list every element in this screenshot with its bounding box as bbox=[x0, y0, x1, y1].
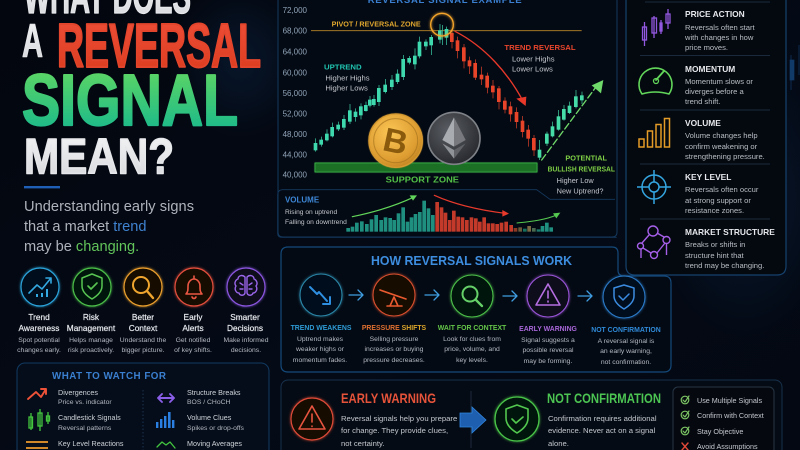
arrow bbox=[503, 291, 517, 301]
item: market structure: Breaks or shifts in bbox=[685, 240, 745, 249]
benefit: trend awareness bbox=[17, 268, 61, 354]
benefit: trend awareness: Trend bbox=[28, 312, 50, 322]
volume trend arrows bbox=[352, 195, 560, 223]
benefit: better context: Understand the bbox=[120, 337, 166, 344]
benefit: smarter decisions: Make informed bbox=[224, 337, 269, 344]
y axis labels bbox=[283, 6, 308, 180]
uptrend candles bbox=[314, 24, 448, 152]
early warning text: not certainty. bbox=[341, 439, 384, 448]
benefit: trend awareness: changes early. bbox=[17, 347, 61, 354]
item: momentum: MOMENTUM bbox=[685, 64, 735, 74]
volume panel: Falling on downtrend bbox=[285, 219, 347, 226]
subtitle: may be changing. bbox=[24, 239, 139, 255]
reversal arrow bbox=[455, 31, 526, 106]
step: early warning: possible reversal bbox=[522, 347, 574, 354]
step: not confirmation: NOT CONFIRMATION bbox=[591, 327, 661, 334]
panel: signal types bbox=[626, 0, 786, 275]
y axis labels: 56,000 bbox=[283, 89, 308, 98]
y axis labels: 44,000 bbox=[283, 151, 308, 160]
benefit: risk management: Risk bbox=[83, 312, 100, 322]
benefit: early alerts: Early bbox=[184, 312, 203, 322]
arrow bbox=[425, 290, 439, 300]
item: market structure: structure hint that bbox=[685, 251, 745, 260]
early warning text: for change. They provide clues, bbox=[341, 426, 448, 435]
not confirmation text: alone. bbox=[548, 439, 569, 448]
item: volume clues: Spikes or drop-offs bbox=[187, 425, 245, 432]
icon: bitcoin: B bbox=[380, 122, 411, 163]
not confirmation text: NOT CONFIRMATION bbox=[547, 390, 661, 406]
step: trend weakens: TREND WEAKENS bbox=[291, 325, 352, 332]
early warning text: EARLY WARNING bbox=[341, 390, 436, 406]
step: wait for context: WAIT FOR CONTEXT bbox=[438, 325, 507, 332]
title bbox=[22, 0, 261, 184]
arrow bbox=[578, 291, 592, 301]
benefit: better context: Context bbox=[129, 323, 158, 333]
item: volume clues: Volume Clues bbox=[187, 413, 232, 422]
icon: warning bbox=[291, 398, 333, 440]
item: momentum: Momentum slows or bbox=[685, 77, 753, 86]
item: key level reactions bbox=[26, 439, 124, 448]
item: volume: strengthening pressure. bbox=[685, 152, 765, 161]
benefit: early alerts: Alerts bbox=[182, 323, 204, 333]
item: price action: with changes in how bbox=[684, 33, 754, 42]
support zone label: SUPPORT ZONE bbox=[386, 175, 459, 185]
item: candlestick signals: Candlestick Signals bbox=[58, 413, 121, 422]
panel: chart bbox=[278, 0, 617, 237]
trend reversal label: Lower Highs bbox=[512, 55, 555, 64]
uptrend label bbox=[324, 63, 370, 93]
uptrend label: Higher Highs bbox=[325, 73, 370, 82]
not confirmation text: Confirmation requires additional bbox=[548, 414, 657, 423]
panel: how reversal signals work bbox=[281, 247, 671, 372]
potential bullish reversal label bbox=[548, 154, 615, 195]
item: key level reactions: Key Level Reactions bbox=[58, 439, 124, 448]
y axis labels: 48,000 bbox=[283, 130, 308, 139]
icon: ethereum bbox=[428, 112, 480, 164]
benefit: trend awareness: Spot potential bbox=[18, 337, 60, 344]
uptrend label: UPTREND bbox=[324, 63, 362, 72]
step: wait for context bbox=[438, 275, 507, 364]
step: pressure shifts: Selling pressure bbox=[370, 336, 419, 343]
step: not confirmation: A reversal signal is bbox=[598, 338, 655, 345]
icon: shield bbox=[495, 397, 539, 441]
checklist bbox=[673, 387, 774, 450]
panel: early warning vs not confirmation bbox=[281, 380, 782, 450]
item: key level bbox=[637, 170, 759, 215]
step: early warning: EARLY WARNING bbox=[519, 326, 577, 333]
benefit: trend awareness: Awareness bbox=[19, 323, 59, 333]
icon: bitcoin bbox=[369, 114, 422, 167]
benefit: smarter decisions: Smarter bbox=[230, 312, 260, 322]
benefit: early alerts: Get notified bbox=[176, 337, 211, 344]
early warning text: Reversal signals help you prepare bbox=[341, 414, 457, 423]
item: key level: at strong support or bbox=[685, 196, 751, 205]
early warning text bbox=[341, 390, 457, 448]
pivot line bbox=[311, 29, 582, 32]
pivot label: PIVOT / REVERSAL ZONE bbox=[332, 19, 421, 28]
step: pressure shifts bbox=[362, 274, 427, 364]
item: key level: Reversals often occur bbox=[685, 185, 759, 194]
step: early warning: Signal suggests a bbox=[521, 337, 575, 344]
checklist: Use Multiple Signals bbox=[697, 396, 763, 405]
trend reversal label: TREND REVERSAL bbox=[504, 43, 576, 52]
potential bullish reversal label: New Uptrend? bbox=[557, 186, 604, 195]
item: candlestick signals: Reversal patterns bbox=[58, 425, 112, 432]
item: volume: Volume changes help bbox=[685, 131, 758, 140]
step: not confirmation bbox=[591, 276, 661, 366]
item: market structure: trend may be changing. bbox=[685, 261, 764, 270]
volume bars bbox=[346, 201, 435, 232]
item: divergences bbox=[28, 388, 112, 406]
step: not confirmation: an early warning, bbox=[600, 348, 652, 355]
title: A bbox=[22, 14, 43, 67]
downtrend candles bbox=[450, 30, 535, 156]
item: momentum: trend shift. bbox=[685, 97, 720, 106]
item: candlestick signals bbox=[29, 409, 121, 432]
arrow bbox=[349, 290, 363, 300]
item: momentum bbox=[639, 64, 753, 106]
subtitle: Understanding early signs bbox=[24, 199, 194, 215]
heading: HOW REVERSAL SIGNALS WORK bbox=[371, 253, 573, 268]
arrow bbox=[460, 407, 486, 433]
y axis labels: 60,000 bbox=[283, 68, 308, 77]
trend reversal label: Lower Lows bbox=[512, 65, 553, 74]
uptrend label: Higher Lows bbox=[325, 84, 368, 93]
step: trend weakens: weaker highs or bbox=[295, 346, 345, 353]
y axis labels: 40,000 bbox=[283, 171, 308, 180]
item: key level: KEY LEVEL bbox=[685, 172, 731, 182]
item: divergences: Price vs. indicator bbox=[58, 399, 112, 406]
step: early warning: may be forming. bbox=[524, 358, 572, 365]
support zone bar bbox=[315, 163, 537, 172]
potential bullish reversal label: POTENTIAL bbox=[565, 154, 607, 163]
item: divergences: Divergences bbox=[58, 388, 98, 397]
y axis labels: 64,000 bbox=[283, 48, 308, 57]
pivot highlight ring bbox=[431, 13, 453, 36]
item: price action: price moves. bbox=[685, 43, 728, 52]
item: price action bbox=[642, 9, 756, 52]
item: structure breaks: Structure Breaks bbox=[187, 388, 241, 397]
step: pressure shifts: increases or buying bbox=[365, 346, 424, 353]
not confirmation text bbox=[547, 390, 661, 448]
step: trend weakens: Uptrend makes bbox=[297, 336, 344, 343]
potential bullish reversal label: BULLISH REVERSAL bbox=[548, 164, 615, 173]
trend reversal label bbox=[504, 43, 576, 74]
recovery candles bbox=[538, 90, 583, 160]
item: volume: VOLUME bbox=[685, 118, 721, 128]
item: volume clues bbox=[156, 412, 245, 432]
benefit: early alerts: of key shifts. bbox=[174, 347, 212, 354]
benefit: early alerts bbox=[174, 268, 213, 354]
benefit: risk management: risk proactively. bbox=[68, 347, 114, 354]
item: market structure: MARKET STRUCTURE bbox=[685, 227, 775, 237]
benefit: smarter decisions: decisions. bbox=[231, 347, 261, 354]
title: SIGNAL bbox=[22, 61, 238, 141]
benefit: smarter decisions bbox=[224, 268, 269, 354]
checklist: Confirm with Context bbox=[697, 411, 764, 420]
item: structure breaks bbox=[158, 388, 241, 406]
checklist: Stay Objective bbox=[697, 427, 743, 436]
benefit: better context bbox=[120, 268, 166, 354]
item: volume bbox=[639, 118, 765, 161]
volume panel bbox=[278, 190, 617, 237]
y axis labels: 72,000 bbox=[283, 6, 308, 15]
step: wait for context: key levels. bbox=[456, 357, 488, 364]
volume panel: Rising on uptrend bbox=[285, 209, 337, 216]
title: MEAN? bbox=[24, 128, 174, 184]
volume panel: VOLUME bbox=[285, 195, 320, 204]
title underline bbox=[24, 186, 60, 188]
benefit: better context: bigger picture. bbox=[121, 347, 165, 354]
title: REVERSAL bbox=[57, 12, 261, 81]
not confirmation text: evidence. Never act on a signal bbox=[548, 426, 656, 435]
item: price action: PRICE ACTION bbox=[685, 9, 745, 19]
item: momentum: diverges before a bbox=[685, 87, 744, 96]
benefit: risk management: Helps manage bbox=[69, 337, 113, 344]
step: wait for context: Look for clues from bbox=[443, 336, 501, 343]
subtitle: that a market trend bbox=[24, 219, 146, 235]
step: pressure shifts: PRESSURE SHIFTS bbox=[362, 325, 427, 332]
y axis labels: 68,000 bbox=[283, 26, 308, 35]
step: early warning bbox=[519, 275, 577, 365]
step: not confirmation: not confirmation. bbox=[601, 359, 651, 366]
benefit: better context: Better bbox=[132, 312, 154, 322]
item: key level: resistance zones. bbox=[685, 206, 744, 215]
step: trend weakens: momentum fades. bbox=[293, 357, 347, 364]
item: moving averages bbox=[157, 439, 242, 448]
item: volume: confirm weakening or bbox=[685, 142, 758, 151]
subtitle bbox=[24, 199, 194, 255]
benefit: smarter decisions: Decisions bbox=[227, 323, 263, 333]
benefit: risk management bbox=[67, 268, 116, 354]
item: moving averages: Moving Averages bbox=[187, 439, 242, 448]
bullish arrow bbox=[542, 80, 603, 160]
item: market structure bbox=[638, 226, 775, 270]
item: structure breaks: BOS / CHoCH bbox=[187, 399, 231, 406]
step: trend weakens bbox=[291, 274, 352, 364]
panel: what to watch for bbox=[17, 363, 269, 450]
heading: what to watch for: WHAT TO WATCH FOR bbox=[52, 371, 166, 382]
item: price action: Reversals often start bbox=[685, 23, 756, 32]
y axis labels: 52,000 bbox=[283, 109, 308, 118]
potential bullish reversal label: Higher Low bbox=[557, 176, 594, 185]
step: wait for context: price, volume, and bbox=[444, 346, 500, 353]
step: pressure shifts: pressure decreases. bbox=[363, 357, 425, 364]
benefit: risk management: Management bbox=[67, 323, 116, 333]
